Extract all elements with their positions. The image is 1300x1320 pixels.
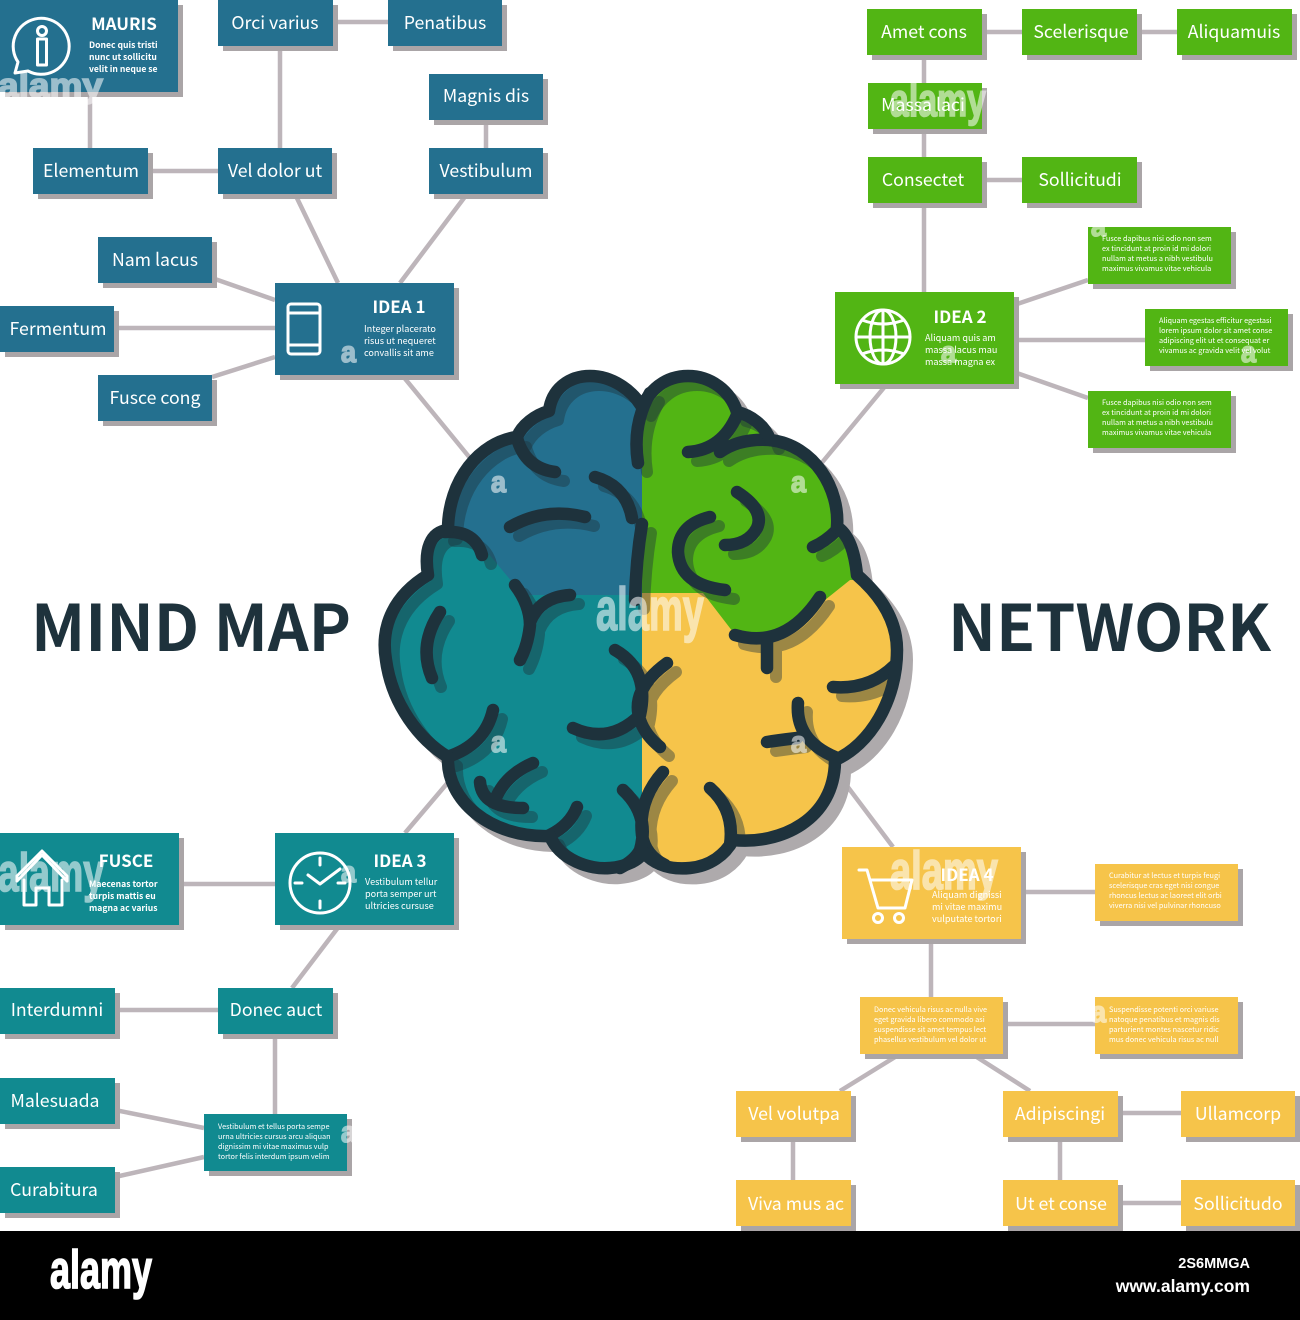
watermarks: a: [1091, 210, 1106, 243]
text box: yellow 3: mus donec vehicula risus ac null: [1109, 1035, 1218, 1045]
node: ullamcorp: [1181, 1091, 1300, 1142]
text box: green 2: lorem ipsum dolor sit amet conse: [1159, 326, 1272, 336]
node: idea 4: [842, 847, 1026, 944]
node: viva mus ac: [736, 1180, 856, 1231]
text box: yellow 1: Curabitur at lectus et turpis feugi: [1109, 871, 1220, 881]
node: donec auct: Donec auct: [230, 996, 323, 1022]
node: donec auct: [218, 988, 338, 1039]
node: idea 1: Integer placerato: [364, 321, 436, 335]
node: vestibulum: [429, 148, 548, 199]
node: interdumni: Interdumni: [11, 996, 103, 1022]
watermarks: alamy: [0, 843, 104, 903]
text box: yellow 3: [1095, 997, 1243, 1059]
node: idea 4: IDEA 4: [940, 861, 994, 886]
node: fusce: magna ac varius: [89, 902, 158, 914]
node: idea 3: [275, 833, 459, 930]
text box: yellow 1: rhoncus lectus ac laoreet elit orbi: [1109, 891, 1222, 901]
node: sollicitudo: Sollicitudo: [1193, 1190, 1283, 1216]
node: sollicitudi: Sollicitudi: [1038, 166, 1122, 192]
watermarks: alamy: [596, 576, 704, 643]
text box: green 1: maximus vivamus vitae vehicula: [1102, 264, 1211, 274]
node: adipiscingi: [1003, 1091, 1123, 1142]
text box: green 3: [1088, 391, 1236, 453]
node: idea 4: vulputate tortori: [932, 911, 1002, 925]
text box: teal: Vestibulum et tellus porta sempe: [218, 1122, 330, 1132]
node: interdumni: [0, 988, 120, 1039]
node: fermentum: [0, 306, 119, 357]
brain illustration: [370, 365, 907, 880]
node: elementum: Elementum: [43, 157, 139, 183]
node: curabitura: [0, 1167, 120, 1218]
panel: teal branch: [0, 833, 459, 1218]
node: sollicitudo: [1181, 1180, 1300, 1231]
node: aliquamuis: [1177, 9, 1297, 60]
node: massa laci: Massa laci: [881, 91, 965, 117]
node: vel volutpa: [736, 1091, 856, 1142]
node: idea 2: massa lacus mau: [925, 342, 997, 356]
node: mauris: Donec quis tristi: [89, 39, 158, 51]
panel: blue branch: [0, 0, 548, 426]
node: fusce: Maecenas tortor: [89, 878, 158, 890]
node: fusce: turpis mattis eu: [89, 890, 156, 902]
watermarks: a: [791, 466, 806, 499]
node: fusce: FUSCE: [99, 847, 153, 872]
node: mauris: velit in neque se: [89, 63, 158, 75]
node: fusce cong: Fusce cong: [110, 384, 200, 410]
node: vel volutpa: Vel volutpa: [748, 1100, 840, 1126]
text box: green 3: Fusce dapibus nisi odio non sem: [1102, 398, 1212, 408]
node: aliquamuis: Aliquamuis: [1188, 18, 1280, 44]
node: idea 2: IDEA 2: [934, 303, 986, 328]
node: idea 3: ultricies cursuse: [365, 898, 434, 912]
node: orci varius: [218, 0, 338, 51]
text box: yellow 2: phasellus vestibulum vel dolor ut: [874, 1035, 987, 1045]
node: scelerisque: Scelerisque: [1033, 18, 1129, 44]
text box: yellow 1: [1095, 864, 1243, 926]
text box: green 1: Fusce dapibus nisi odio non sem: [1102, 234, 1212, 244]
node: idea 1: convallis sit ame: [364, 345, 434, 359]
text box: yellow 3: parturient montes nascetur ridic: [1109, 1025, 1219, 1035]
node: fusce cong: [98, 375, 217, 426]
connector lines: [90, 22, 1181, 1203]
text box: yellow 3: Suspendisse potenti orci variuse: [1109, 1005, 1219, 1015]
watermarks: a: [941, 336, 956, 369]
text box: yellow 2: [860, 997, 1008, 1059]
node: sollicitudi: [1022, 157, 1142, 208]
node: idea 1: IDEA 1: [372, 293, 426, 318]
watermarks: a: [791, 726, 806, 759]
footer bar: 2S6MMGA: [1178, 1256, 1251, 1272]
footer bar: www.alamy.com: [1115, 1276, 1250, 1296]
node: viva mus ac: Viva mus ac: [748, 1190, 844, 1216]
text box: yellow 1: viverra nisi vel pulvinar rhoncuso: [1109, 901, 1221, 911]
text box: green 2: Aliquam egestas efficitur egestasi: [1159, 316, 1271, 326]
node: scelerisque: [1022, 9, 1142, 60]
text box: yellow 3: natoque penatibus et magnis dis: [1109, 1015, 1220, 1025]
text box: teal: dignissim mi vitae maximus vulp: [218, 1142, 329, 1152]
watermarks: a: [491, 726, 506, 759]
watermarks: a: [341, 1116, 356, 1149]
node: consectet: [868, 157, 987, 208]
node: adipiscingi: Adipiscingi: [1015, 1100, 1105, 1126]
text box: teal: urna ultricies cursus arcu aliquan: [218, 1132, 331, 1142]
panel: green branch: [835, 9, 1297, 453]
watermarks: a: [491, 466, 506, 499]
text box: teal: tortor felis interdum ipsum velim: [218, 1152, 330, 1162]
node: idea 4: Aliquam dignissi: [932, 887, 1002, 901]
watermarks: a: [1241, 336, 1256, 369]
node: mauris: nunc ut sollicitu: [89, 51, 157, 63]
node: elementum: [33, 148, 153, 199]
node: idea 4: mi vitae maximu: [932, 899, 1002, 913]
node: ut et conse: [1003, 1180, 1123, 1231]
node: malesuada: Malesuada: [10, 1087, 100, 1113]
watermarks: a: [341, 336, 356, 369]
node: idea 2: massa magna ex: [925, 354, 996, 368]
watermarks: alamy: [890, 74, 986, 126]
watermarks: [0, 67, 1256, 1149]
node: idea 3: porta semper urt: [365, 886, 437, 900]
footer bar: [0, 1231, 1300, 1320]
node: mauris: MAURIS: [91, 10, 157, 35]
text box: green 3: ex tincidunt at proin id mi dolori: [1102, 408, 1211, 418]
watermarks: a: [341, 856, 356, 889]
panel: yellow branch: [736, 847, 1300, 1231]
node: idea 1: [275, 283, 459, 380]
node: magnis dis: Magnis dis: [443, 82, 529, 108]
text box: green 3: maximus vivamus vitae vehicula: [1102, 428, 1211, 438]
node: vel dolor ut: Vel dolor ut: [228, 157, 322, 183]
node: idea 3: IDEA 3: [374, 847, 426, 872]
node: mauris: [0, 0, 183, 97]
footer bar: alamy: [50, 1240, 152, 1300]
node: vel dolor ut: [218, 148, 337, 199]
node: fusce: [0, 833, 184, 930]
watermarks: alamy: [890, 841, 998, 901]
watermarks: a: [1091, 996, 1106, 1029]
node: penatibus: [388, 0, 507, 51]
node: ullamcorp: Ullamcorp: [1195, 1100, 1281, 1126]
text box: green 2: [1145, 309, 1293, 371]
node: amet cons: Amet cons: [881, 18, 967, 44]
node: penatibus: Penatibus: [404, 9, 486, 35]
text box: green 1: ex tincidunt at proin id mi dolori: [1102, 244, 1211, 254]
text box: yellow 2: Donec vehicula risus ac nulla vive: [874, 1005, 987, 1015]
text box: green 1: nullam at metus a nibh vestibulu: [1102, 254, 1213, 264]
node: idea 1: risus ut nequeret: [364, 333, 436, 347]
text box: green 2: vivamus ac gravida velit vel volut: [1159, 346, 1271, 356]
title: mind map: MIND MAP: [31, 578, 351, 670]
node: idea 2: [835, 292, 1019, 389]
node: orci varius: Orci varius: [231, 9, 319, 35]
node: curabitura: Curabitura: [10, 1176, 98, 1202]
node: magnis dis: [429, 74, 548, 125]
text box: green 1: [1088, 227, 1236, 289]
node: fermentum: Fermentum: [10, 315, 106, 341]
node: malesuada: [0, 1078, 120, 1129]
node: ut et conse: Ut et conse: [1015, 1190, 1107, 1216]
node: vestibulum: Vestibulum: [440, 157, 532, 183]
text box: green 3: nullam at metus a nibh vestibulu: [1102, 418, 1213, 428]
text box: green 2: adipiscing elit ut et consequat er: [1159, 336, 1269, 346]
node: amet cons: [867, 9, 987, 60]
node: massa laci: [868, 83, 987, 134]
title: network: NETWORK: [948, 578, 1272, 670]
node: idea 2: Aliquam quis am: [925, 330, 996, 344]
node: nam lacus: Nam lacus: [112, 246, 198, 272]
node: idea 3: Vestibulum tellur: [365, 874, 438, 888]
node: consectet: Consectet: [882, 166, 965, 192]
node: nam lacus: [98, 237, 217, 288]
watermarks: alamy: [0, 67, 103, 105]
text box: yellow 1: scelerisque cras eget nisi congue: [1109, 881, 1219, 891]
text box: yellow 2: suspendisse sit amet tempus lect: [874, 1025, 987, 1035]
text box: yellow 2: eget gravida libero commodo asi: [874, 1015, 985, 1025]
text box: teal: [204, 1114, 352, 1176]
